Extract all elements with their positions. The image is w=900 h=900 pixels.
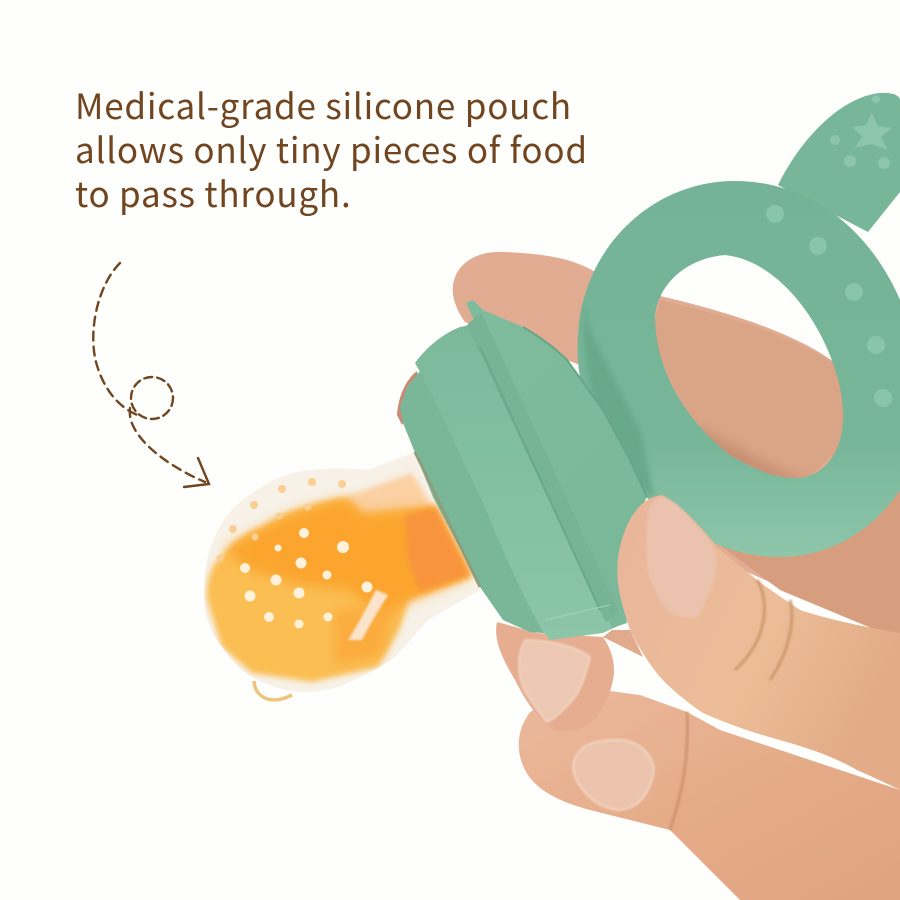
teether ring with ear [577,93,900,557]
heading text: to pass through. [75,167,351,218]
lower hand with middle finger and nail [519,690,900,900]
heading text: allows only tiny pieces of food [75,123,588,174]
index fingertip with nail [496,622,643,731]
silicone pouch with food [204,452,480,700]
back hand: fingers behind the teether [397,252,900,640]
heading text [75,79,588,218]
heading text: Medical-grade silicone pouch [75,79,572,130]
thumb with nail [617,495,900,790]
dashed curved arrow [93,263,209,487]
silicone cap [400,300,647,640]
